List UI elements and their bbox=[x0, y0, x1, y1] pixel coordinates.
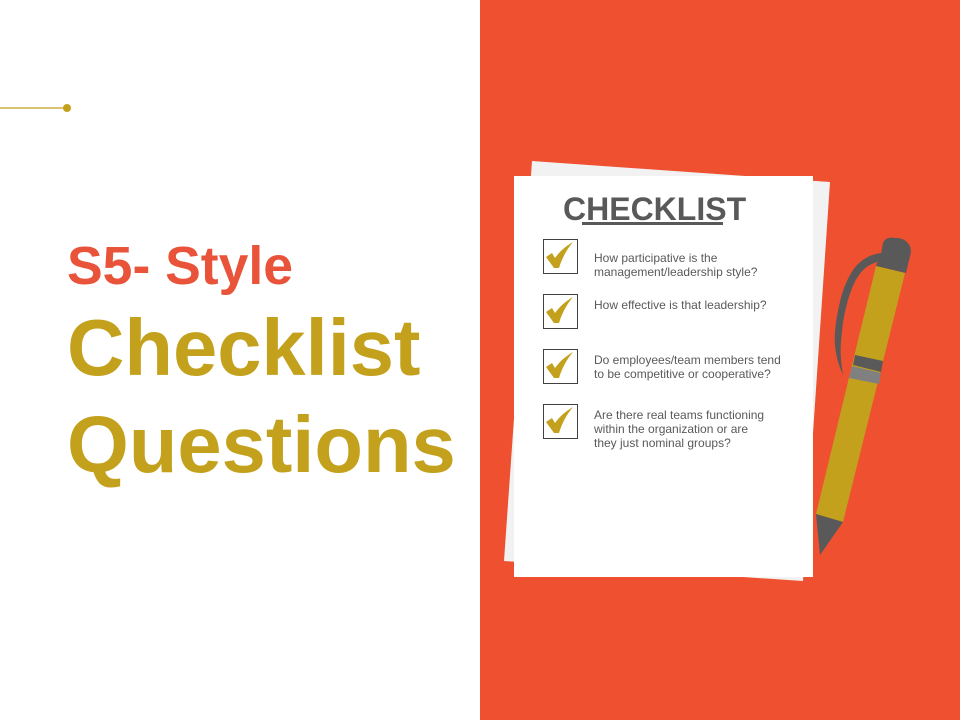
pen grey band bbox=[849, 366, 881, 384]
question 3 bbox=[594, 353, 781, 381]
pen cap bbox=[876, 238, 911, 273]
front sheet bbox=[514, 176, 813, 577]
question 3: Do employees/team members tend bbox=[594, 353, 781, 367]
pen body bbox=[816, 266, 905, 522]
heading: Checklist Questions: Checklist bbox=[67, 303, 420, 392]
question 4: within the organization or are bbox=[594, 422, 748, 436]
icon: pen bbox=[816, 238, 911, 555]
question 1: How participative is the bbox=[594, 251, 717, 265]
checkbox 3 bbox=[543, 349, 578, 384]
question 3: to be competitive or cooperative? bbox=[594, 367, 771, 381]
title underline bbox=[582, 222, 723, 225]
heading: Checklist Questions: Questions bbox=[67, 400, 456, 489]
panel: orange right background bbox=[480, 0, 960, 720]
illustration: paper sheets and pen bbox=[504, 161, 911, 581]
question 2: How effective is that leadership? bbox=[594, 298, 767, 312]
checkbox 1 bbox=[543, 239, 578, 274]
checkbox 4 bbox=[543, 404, 578, 439]
heading: Checklist Questions bbox=[67, 303, 456, 489]
back sheet bbox=[504, 161, 830, 581]
question 1: management/leadership style? bbox=[594, 265, 757, 279]
checklist title: CHECKLIST bbox=[563, 191, 746, 227]
question 4 bbox=[594, 408, 764, 450]
pen clip bbox=[835, 253, 882, 375]
question 4: they just nominal groups? bbox=[594, 436, 731, 450]
pen dark band bbox=[853, 355, 883, 372]
checkbox 2 bbox=[543, 294, 578, 329]
decorative line with dot bbox=[0, 104, 71, 112]
question 4: Are there real teams functioning bbox=[594, 408, 764, 422]
heading: S5- Style: S5- Style bbox=[67, 237, 293, 296]
question 1 bbox=[594, 251, 757, 279]
pen tip bbox=[816, 514, 843, 555]
